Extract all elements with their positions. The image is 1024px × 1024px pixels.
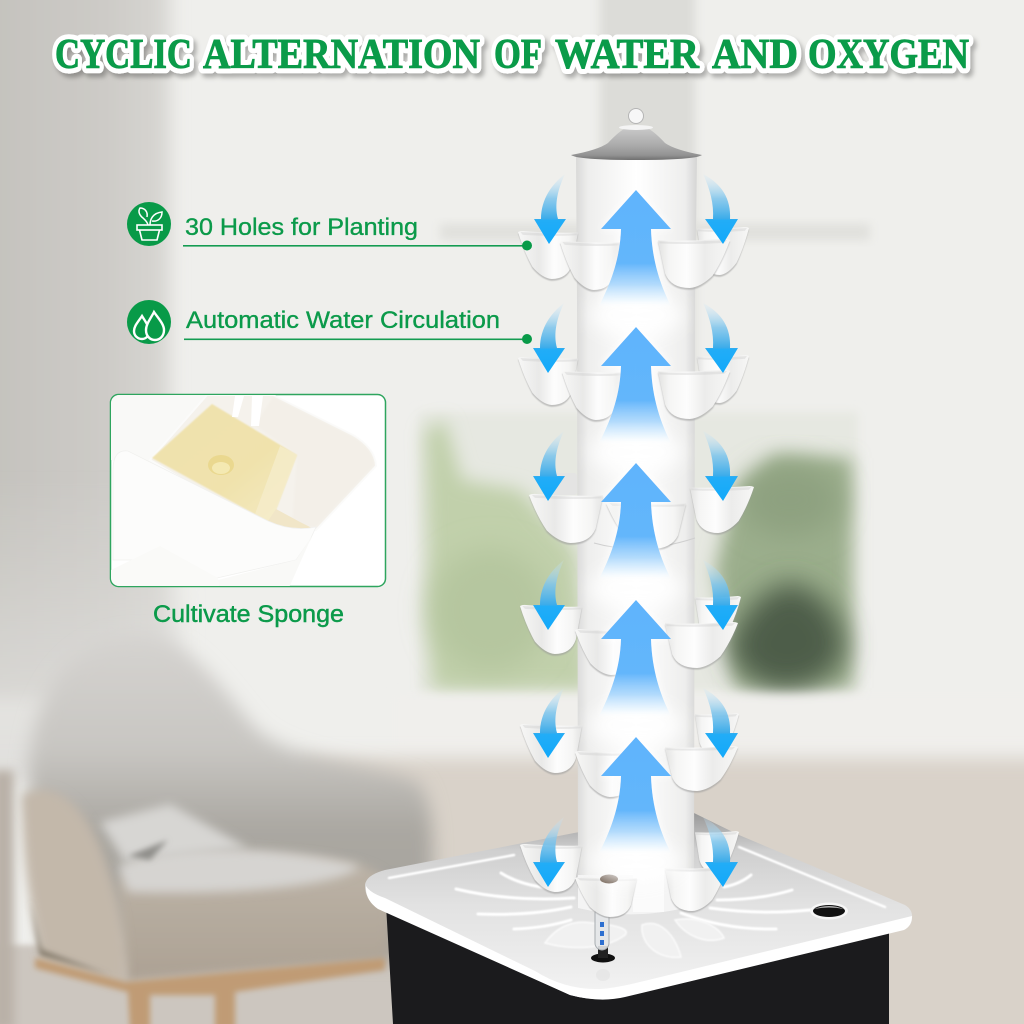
title: AND [712, 32, 798, 78]
wooden frame and legs [35, 958, 385, 1024]
leader line [184, 334, 532, 344]
base collar [578, 875, 696, 914]
sponge [152, 404, 297, 523]
up arrow 1 [590, 190, 682, 337]
icon: water drops [127, 300, 171, 344]
tray back wall [150, 395, 376, 530]
lower tray body [111, 560, 220, 586]
up arrow 5 [590, 737, 682, 884]
lid front band [366, 886, 912, 1000]
armchair [0, 636, 433, 1024]
panel: cultivate sponge [110, 394, 386, 590]
caption: cultivate sponge: Cultivate Sponge [153, 601, 344, 628]
left arm [22, 790, 126, 985]
title: OXYGEN [808, 32, 969, 78]
flower petals [545, 919, 724, 957]
downward water arrows [533, 174, 738, 887]
tier 5 pots [520, 713, 739, 799]
white tray lid [365, 813, 912, 999]
title: WATER [555, 32, 700, 78]
black tank [386, 905, 889, 1024]
down arrows tier 4 [533, 560, 738, 630]
reservoir base [365, 813, 912, 1024]
seat [118, 853, 392, 982]
planting pots [518, 227, 754, 919]
leader line [183, 240, 532, 250]
down arrows tier 2 [533, 303, 738, 373]
icon: plant pot [127, 202, 171, 246]
tier 2 pots [518, 355, 749, 422]
tower cap [571, 108, 702, 160]
title: ALTERNATION [203, 32, 480, 78]
feature: 30 holes for planting [127, 202, 532, 250]
pillow [100, 804, 248, 862]
upward airflow arrows [590, 190, 682, 884]
title: CYCLIC [55, 32, 192, 78]
tier 3 pots [529, 473, 754, 551]
far-left strip [0, 770, 14, 1024]
window opening [418, 412, 858, 692]
down arrows tier 1 [534, 174, 738, 244]
label: 30 holes: 30 Holes for Planting [185, 214, 418, 241]
down arrows tier 5 [533, 688, 738, 758]
down arrows tier 6 [533, 817, 738, 887]
title: OF [494, 32, 542, 78]
title: ALTERNATION [203, 32, 480, 78]
tray front wall [113, 451, 316, 578]
tray rim highlights [389, 847, 885, 907]
title: OF [494, 32, 542, 78]
water level gauge [591, 906, 615, 981]
title [55, 32, 969, 78]
chair back [28, 636, 433, 960]
feature: automatic water circulation [127, 300, 532, 344]
pegs [232, 396, 263, 426]
up arrow 2 [590, 327, 682, 474]
tier 1 pots [518, 227, 749, 292]
title: OXYGEN [808, 32, 969, 78]
up arrow 4 [590, 600, 682, 747]
down arrows tier 3 [533, 431, 738, 501]
tier 6 pots [520, 831, 739, 919]
label: water circulation: Automatic Water Circulation [186, 307, 500, 334]
radial ribs [456, 873, 810, 929]
title: WATER [555, 32, 700, 78]
tower column [576, 155, 697, 914]
title: CYCLIC [55, 32, 192, 78]
title: AND [712, 32, 798, 78]
up arrow 3 [590, 463, 682, 610]
tier 4 pots [520, 596, 741, 677]
overflow hole [810, 902, 848, 920]
